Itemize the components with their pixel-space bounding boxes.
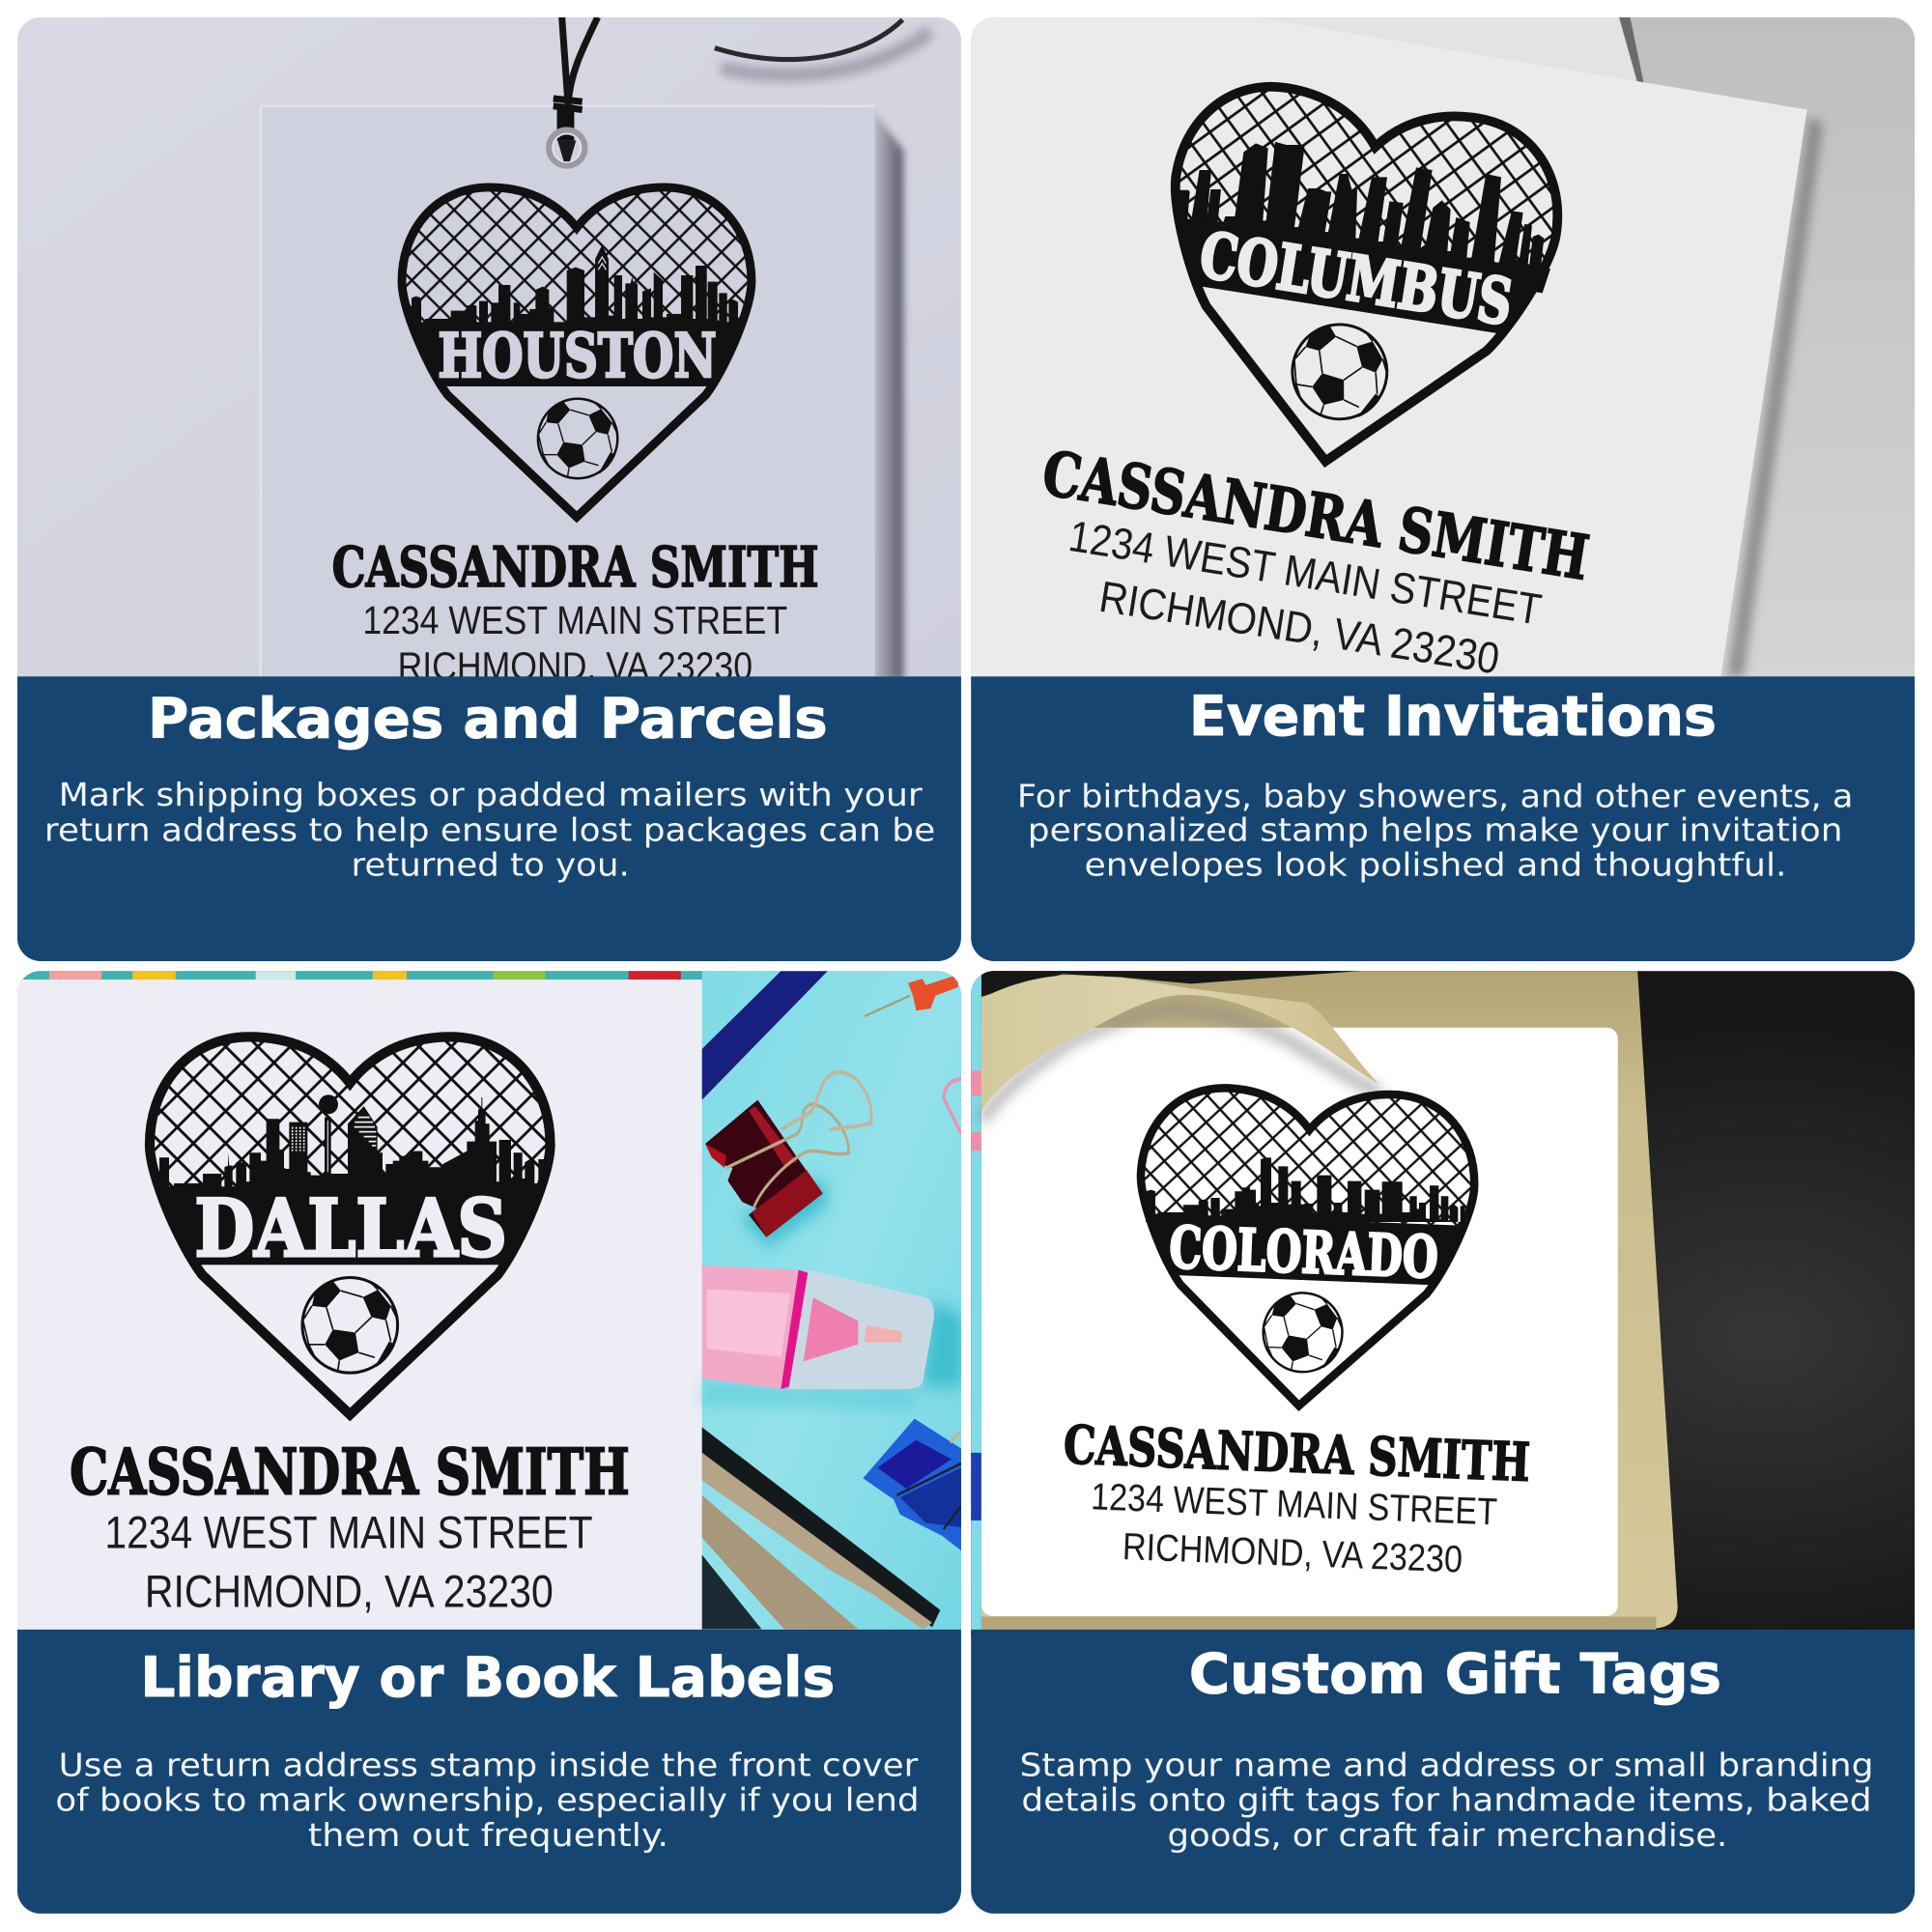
heading: Custom Gift Tags bbox=[1189, 1642, 1721, 1707]
stamp artwork: Dallas heart and text: RICHMOND, VA 23230 bbox=[145, 1566, 554, 1617]
stamp artwork: Columbus heart and text: 1234 WEST MAIN STREET bbox=[1065, 511, 1545, 635]
stationery items bbox=[702, 966, 966, 1646]
photo: paper on cyan desk with stationery bbox=[17, 966, 966, 1646]
photo: paper sheets on grey background bbox=[971, 17, 1915, 683]
stamp artwork: Colorado heart and text: 1234 WEST MAIN STREET bbox=[1091, 1475, 1498, 1533]
skyline: Dallas bbox=[159, 1094, 544, 1193]
skyline: Columbus bbox=[1178, 142, 1550, 293]
body text: personalized stamp helps make your invitation bbox=[1028, 811, 1843, 849]
body text bbox=[55, 1747, 920, 1854]
stamp: Colorado bbox=[1059, 1077, 1544, 1583]
caption: library or book labels bbox=[17, 1630, 961, 1919]
panel: packages and parcels bbox=[17, 17, 961, 966]
stamp artwork: Houston heart and text: HOUSTON bbox=[438, 320, 717, 391]
body text: them out frequently. bbox=[308, 1816, 668, 1854]
stamp artwork: Dallas heart and text bbox=[70, 1031, 630, 1617]
panel: event invitations bbox=[971, 17, 1915, 966]
stamp artwork: Columbus heart and text: CASSANDRA SMITH bbox=[1037, 437, 1594, 594]
heading: Library or Book Labels bbox=[140, 1645, 835, 1710]
stamp artwork: Houston heart and text: CASSANDRA SMITH bbox=[332, 534, 819, 600]
body text: return address to help ensure lost packages can be bbox=[44, 811, 935, 849]
panel: library or book labels bbox=[17, 966, 966, 1919]
photo: hang tag on grey background bbox=[17, 17, 961, 683]
caption: event invitations bbox=[971, 676, 1915, 966]
body text: Mark shipping boxes or padded mailers with your bbox=[59, 776, 923, 813]
stamp artwork: Dallas heart and text: 1234 WEST MAIN STREET bbox=[104, 1508, 593, 1559]
stamp artwork: Dallas heart and text: CASSANDRA SMITH bbox=[70, 1435, 630, 1510]
stamp artwork: Colorado heart and text: CASSANDRA SMITH bbox=[1063, 1413, 1531, 1493]
heading: Event Invitations bbox=[1189, 684, 1717, 749]
body text: For birthdays, baby showers, and other events, a bbox=[1017, 778, 1853, 815]
stamp artwork: Columbus heart and text bbox=[1044, 81, 1590, 672]
stamp artwork: Colorado heart and text: RICHMOND, VA 23230 bbox=[1122, 1525, 1463, 1581]
stamp artwork: Houston heart and text bbox=[332, 182, 819, 688]
stamp artwork: Houston heart and text: 1234 WEST MAIN STREET bbox=[362, 598, 787, 642]
skyline: Houston bbox=[412, 244, 738, 324]
body text: goods, or craft fair merchandise. bbox=[1168, 1816, 1727, 1854]
body text: Use a return address stamp inside the front cover bbox=[59, 1747, 919, 1784]
stamp: Houston bbox=[332, 182, 819, 688]
stamp: Dallas bbox=[70, 1031, 630, 1617]
stamp: Columbus bbox=[1044, 81, 1590, 672]
body text bbox=[1019, 1747, 1873, 1854]
stamp artwork: Columbus heart and text: COLUMBUS bbox=[1195, 218, 1518, 340]
stamp artwork: Colorado heart and text: COLORADO bbox=[1168, 1214, 1439, 1292]
caption: packages and parcels bbox=[17, 676, 961, 966]
body text: returned to you. bbox=[352, 845, 630, 883]
body text bbox=[1017, 778, 1853, 883]
stamp artwork: Houston heart and text: RICHMOND, VA 23230 bbox=[398, 643, 753, 688]
body text: envelopes look polished and thoughtful. bbox=[1084, 845, 1787, 883]
body text: of books to mark ownership, especially if you lend bbox=[55, 1780, 920, 1818]
caption: custom gift tags bbox=[971, 1630, 1915, 1919]
photo: white label on gold card and black background bbox=[971, 971, 1915, 1636]
stamp artwork: Colorado heart and text bbox=[1059, 1077, 1544, 1583]
heading: Packages and Parcels bbox=[148, 686, 828, 751]
skyline: Colorado bbox=[1146, 1157, 1465, 1224]
stamp artwork: Columbus heart and text: RICHMOND, VA 23230 bbox=[1096, 572, 1503, 684]
body text: Stamp your name and address or small branding bbox=[1019, 1747, 1873, 1784]
body text bbox=[44, 776, 935, 883]
body text: details onto gift tags for handmade items, baked bbox=[1021, 1780, 1872, 1818]
panel: custom gift tags bbox=[971, 971, 1915, 1919]
ribbon bbox=[981, 975, 1378, 1111]
stamp artwork: Dallas heart and text: DALLAS bbox=[195, 1183, 507, 1275]
